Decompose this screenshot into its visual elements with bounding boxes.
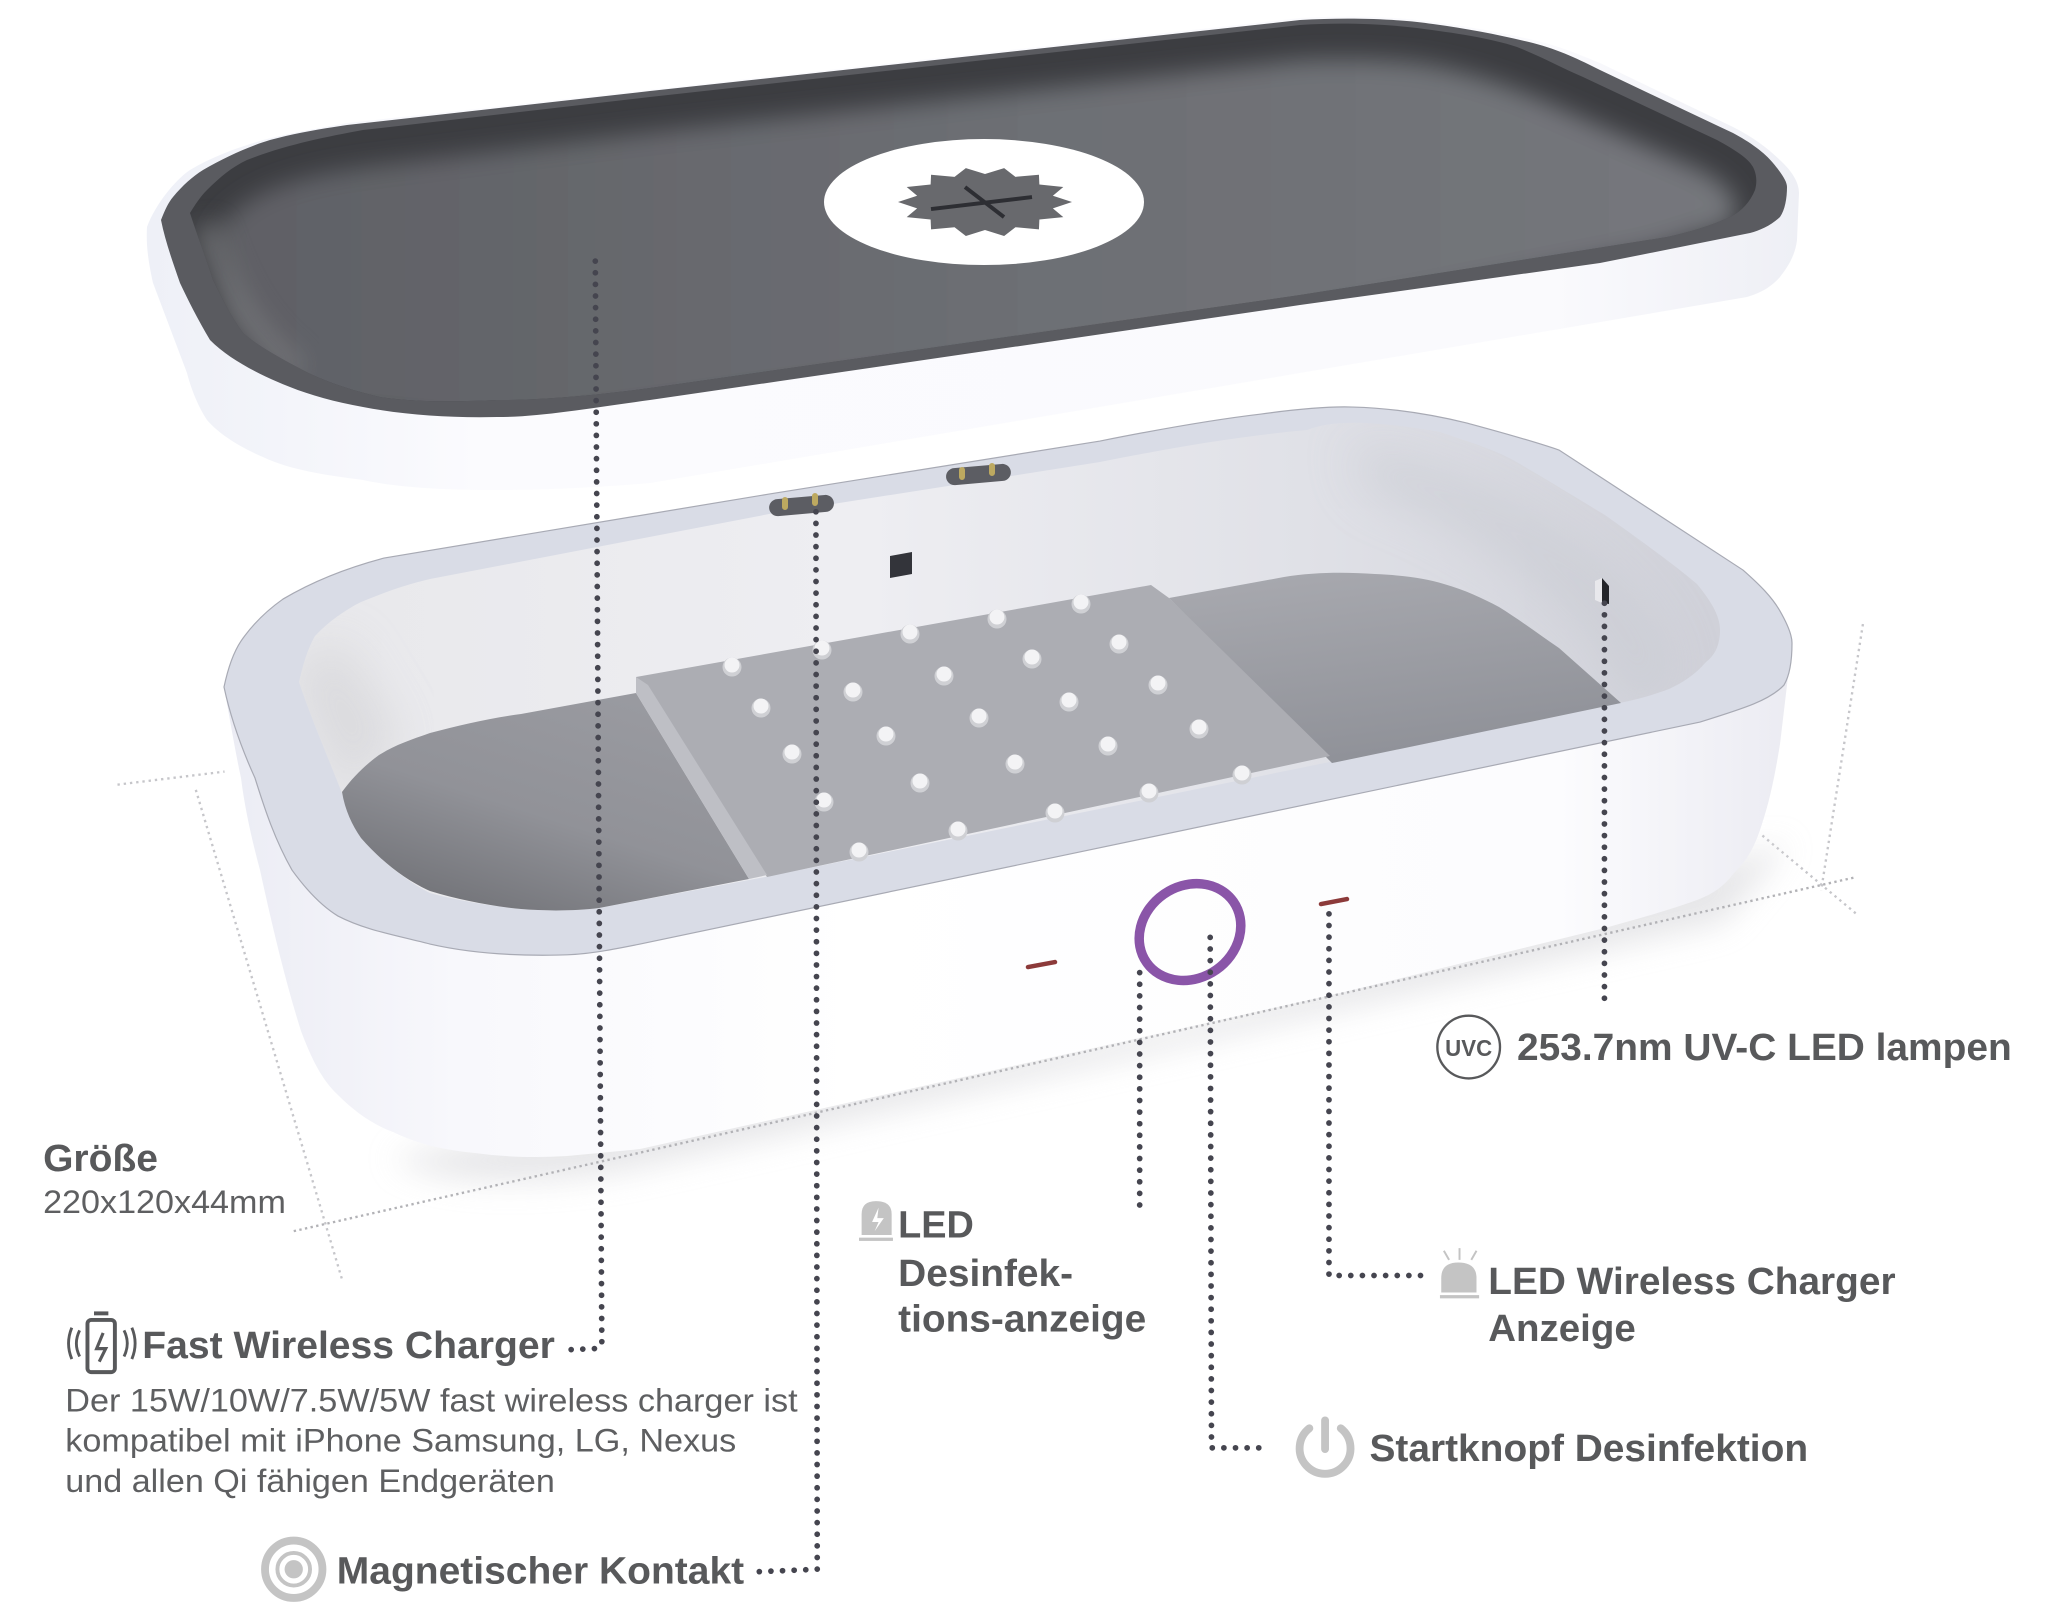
text block: charger description: und allen Qi fähigen Endgeräten [65,1462,555,1499]
leader line: magnetic contact [755,512,817,1572]
soft shadow under the base [392,843,1789,1180]
left floor pad [342,693,749,910]
heading: fast wireless charger: Fast Wireless Charger [142,1325,555,1367]
text block: charger description: Der 15W/10W/7.5W/5W fast wireless charger ist [65,1381,798,1418]
size label [43,1138,286,1220]
heading: UVC lamps: 253.7nm UV-C LED lampen [1517,1027,2012,1069]
icon: LED disinfection lamp [859,1201,893,1241]
icon: UVC badge: UVC [1445,1035,1492,1061]
base rim [224,407,1792,955]
size label: 220x120x44mm [43,1183,286,1220]
lid inner floor [190,24,1756,401]
magnetic contact left [768,494,835,517]
icon: power button [1300,1420,1351,1474]
text block: charger description: kompatibel mit iPhone Samsung, LG, Nexus [65,1422,736,1459]
lid of the sanitizer box [147,0,1800,490]
base interior wall [300,435,1720,906]
heading: LED disinfection indicator [898,1205,1146,1341]
wireless charging logo [824,139,1144,265]
dimension baseline [294,877,1855,1231]
sterilisation pegs [732,602,1242,852]
icon: wireless charging phone [69,1313,135,1372]
heading: LED wireless charger indicator [1488,1261,1896,1350]
heading: LED wireless charger indicator: Anzeige [1488,1308,1636,1350]
icon: siren [1440,1248,1479,1298]
heading: LED disinfection indicator: tions-anzeige [898,1299,1146,1341]
size label: Größe [43,1138,158,1180]
UV lamp window left [890,552,912,578]
leader line: UVC lamps [1602,603,1607,999]
red indicator mark right [1321,899,1347,904]
leader line: LED disinfection [1137,973,1142,1208]
red indicator mark left [1028,962,1055,967]
heading: LED disinfection indicator: LED [898,1205,974,1247]
heading: start button: Startknopf Desinfektion [1369,1428,1808,1470]
lid dark rim [161,19,1787,417]
right floor pad [1169,573,1621,763]
magnetic contact right [945,463,1012,486]
leader line: fast wireless charger [564,261,602,1350]
purple power ring [1120,864,1260,1000]
UV lamp window right [1595,578,1609,604]
heading: LED disinfection indicator: Desinfek- [898,1253,1073,1295]
heading: LED wireless charger indicator: LED Wireless Charger [1488,1261,1896,1303]
base white body [224,643,1792,1157]
base of the sanitizer box [224,400,1792,1157]
leader line: start button [1210,937,1269,1448]
centre plate [636,585,1330,877]
leader line: LED wireless charger [1329,914,1426,1276]
icon: UVC badge [1437,1016,1500,1078]
icon: magnetic contact target [265,1541,322,1598]
centre plate side [636,677,767,879]
text block: charger description [65,1381,798,1499]
dimension guide lines [117,624,1863,1279]
lid white shell [147,17,1799,490]
heading: magnetic contact: Magnetischer Kontakt [337,1551,745,1593]
